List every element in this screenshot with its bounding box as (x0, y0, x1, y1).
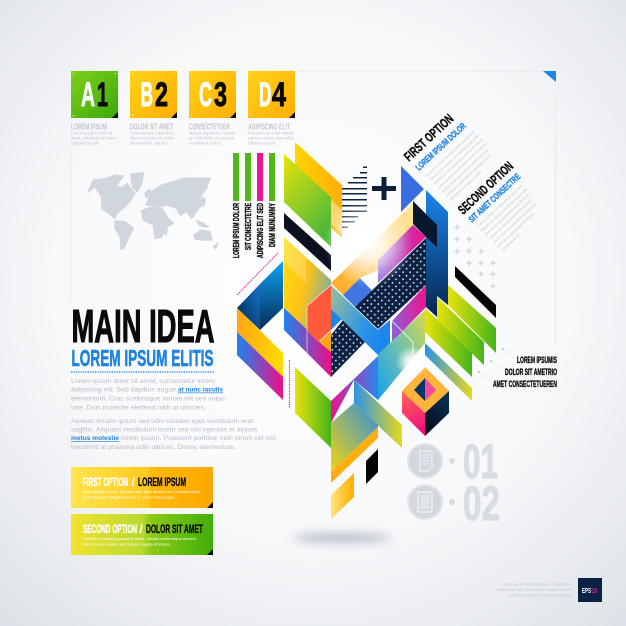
vertical bar labels: ADIPISCING ELIT SED (256, 203, 265, 258)
tile C3: C (199, 76, 212, 114)
left magenta band (237, 332, 283, 400)
tile captions: ADIPISCING ELIT (248, 122, 290, 132)
button: first option: / (132, 475, 136, 489)
body text: Aenean ornare ipsum sed odio sodales eget vestibulum erat (71, 418, 253, 425)
magenta blue band (331, 356, 378, 423)
vertical bar labels: SIT CONSECTETRE (244, 203, 253, 250)
small blue triangle (331, 308, 342, 330)
diagonal text block: second option (476, 184, 538, 253)
blue triangle (401, 166, 424, 212)
diagonal heading: first option: FIRST OPTION (401, 111, 456, 164)
left blue diamond right half (260, 261, 283, 330)
cube (402, 367, 449, 436)
body text: adipiscing elit. Sed dapibus augue (71, 386, 176, 394)
body text: hendrerit at pharetra odio ultrices. Donec elementum. (71, 444, 236, 451)
button: first option (71, 467, 213, 508)
tile A1 (71, 71, 118, 118)
tile D4: D (259, 76, 272, 114)
tile C3: 3 (214, 76, 227, 114)
outline on red block (307, 285, 331, 353)
dot 2 (449, 499, 455, 505)
dot 1 (449, 458, 455, 464)
outline shard (390, 319, 413, 363)
footer text (497, 582, 573, 598)
button: second option (71, 514, 213, 555)
geometric composition (237, 142, 496, 519)
purple magenta band (378, 225, 426, 283)
tile captions: Pellentesque bibendum, (130, 130, 175, 136)
tile A1: A (81, 76, 95, 114)
number 01: 01 (463, 436, 498, 489)
diagonal text block: second option: nisl egestas et (500, 233, 521, 253)
blue center parallelogram (343, 278, 378, 307)
button: second option: SECOND OPTION (83, 522, 137, 536)
lower purple band (392, 285, 426, 342)
orange strip (331, 427, 378, 483)
tile D4: 4 (272, 76, 286, 114)
green bottom left parallelogram (295, 367, 331, 448)
tile captions: Mauris dignissim, mauris (189, 130, 235, 136)
right labels: AMET CONSECTETUEREN (493, 379, 557, 389)
diagonal text block: first option: aenean ornare ipsum sed odio sodales eget erat (441, 148, 490, 194)
teal yellow parallelogram (354, 380, 402, 448)
button: first option: FIRST OPTION (83, 475, 128, 489)
yellow blue block (331, 403, 378, 472)
body text: metus molestie (71, 435, 119, 442)
body text: Lorem ipsum dolor sit amet, consectetur lorem (71, 378, 215, 385)
footer text: Lorem ipsum dolor sit amet, consectetur (501, 582, 573, 586)
tall blue column (426, 190, 448, 317)
diagonal text block: second option: vulputate duis molestie eleifend nibh ut ultricies (488, 198, 533, 241)
tile captions: DOLOR SIT AMET (130, 122, 173, 132)
diagonal heading: first option: LOREM IPSUM DOLOR (414, 121, 468, 172)
diagonal text block: first option: nisl egestas et aliquet metus (449, 170, 482, 202)
tile captions: varius turpis convallis (248, 136, 294, 140)
tile captions: ullamcorper. (248, 140, 277, 146)
tile captions (71, 122, 294, 146)
diagonal text block: first option: Aliquam erat volutpat, sed dapibus augue nulla (429, 133, 480, 182)
teal diagonal band (331, 285, 390, 355)
subheading: LOREM IPSUM ELITIS (72, 345, 214, 371)
tile C3 (189, 71, 236, 118)
button: second option: Curabitur vehicula posuere tellus. Mauris scelerisque laoreet (83, 536, 197, 541)
lens glare bottom (396, 346, 428, 378)
tile B2: 2 (155, 76, 168, 114)
top orange parallelogram (295, 142, 342, 238)
lens glare top (324, 199, 412, 287)
button: first option: ante et augue fringilla cursus, in porta metus eget. (83, 494, 175, 500)
diagonal text block: first option: Praesent ac metus vel magna tempor varius lorem (425, 130, 476, 178)
plus icon (372, 177, 396, 200)
icon: blue corner triangle (543, 71, 556, 82)
red block (307, 285, 331, 342)
tile captions: elementum, sapien. (130, 140, 169, 146)
diagonal heading: second option: SECOND OPTION (455, 158, 516, 217)
EPS badge: EPS (582, 588, 591, 595)
tile captions: adipiscing elit. (71, 140, 100, 146)
main idea heading: MAIN IDEA (72, 300, 214, 352)
icon: document circle (408, 444, 442, 478)
footer text: iaculis elementum cras scelerisque. (509, 592, 572, 598)
tile captions: libero id posuere dolor (130, 136, 175, 140)
button: second option: odio sit amet volutlex. Sed semper, magna ut tempus. (83, 542, 171, 546)
orange glare band (331, 203, 413, 295)
button: second option: / (140, 522, 144, 536)
yellow column highlight (284, 237, 306, 283)
diagonal text block: second option: aenean ornare ipsum sed odio sodales eget erat (492, 202, 538, 245)
stripes half circle (342, 166, 367, 228)
small orange (319, 331, 331, 352)
center dotted diamond (355, 238, 426, 329)
diagonal text block: first option (425, 130, 492, 202)
right teal band (425, 343, 472, 401)
tile captions: Lorem ipsum dolor sit (71, 130, 113, 136)
tile captions: LOREM IPSUM (71, 122, 107, 132)
diagonal text block: second option: vestibulum sagittis aliquam vestibulum (496, 212, 535, 249)
translucent band (378, 310, 425, 400)
diagonal text block: second option: Praesent ac metus vel magna tempor varius lorem (476, 184, 524, 229)
body text: lorem ipsum. Praesent porttitor nibh lorem vel nisi (121, 435, 277, 442)
tile captions: Praesent sit amet mauris (248, 130, 294, 136)
right labels: LOREM IPSUMIS (517, 355, 557, 365)
frame (70, 71, 556, 345)
left blue diamond left half (237, 284, 260, 330)
icon: tablet circle (408, 484, 442, 520)
EPS badge: 10 (592, 588, 598, 595)
lime parallelogram (284, 154, 331, 247)
right labels: DOLOR SIT AMETRIO (505, 367, 557, 377)
body text: elementum. Cras scelerisque rutrum elit sed vulpu- (71, 396, 227, 402)
button: first option: LOREM IPSUM (138, 475, 186, 489)
button: first option: Nulla facilisi. Fusce ut lorem elit, eget auctor nisl. Curabitur quis (83, 489, 200, 494)
magenta dotted vertical (288, 360, 290, 408)
vertical bar labels (232, 203, 277, 258)
diagonal heading: second option: SIT AMET CONSECTRE (467, 171, 522, 224)
number 02: 02 (463, 478, 500, 531)
right labels (493, 355, 557, 389)
diagonal text block: second option: elementum cras scelerisque rutrum elit sed mi (484, 193, 531, 237)
tile B2 (130, 71, 177, 118)
button: second option: DOLOR SIT AMET (146, 522, 203, 536)
tile captions: CONSECTETUER (189, 122, 230, 132)
plus sign grid (454, 224, 496, 289)
diagonal heading: second option (455, 158, 522, 224)
diagonal text block: first option: elementum cras scelerisque rutrum elit sed mi (433, 138, 484, 186)
diagonal text block: second option: Aliquam erat volutpat, sed dapibus augue nulla (480, 187, 529, 233)
diagonal heading: first option (401, 111, 468, 172)
body text: tate. Duis molestie eleifend nibh ut ultricies. (71, 404, 206, 412)
yellow column (284, 237, 331, 330)
tile D4 (248, 71, 295, 118)
green magenta bars (233, 153, 275, 201)
vertical bar labels: LOREM IPSUM DOLOR (232, 203, 241, 258)
black small parallelogram (366, 449, 378, 484)
tile captions: vestibulum purus. (189, 140, 222, 146)
ground shadow (292, 534, 392, 542)
tile B2: B (140, 76, 153, 114)
footer text: adipiscing elit. Sed dapibus augue at nunc (497, 587, 572, 592)
right green band 2 (437, 297, 484, 365)
tile captions: amet, consectetur lorem (71, 136, 117, 140)
right green band 1 (448, 285, 496, 353)
right black stripe (455, 266, 496, 318)
body text (71, 378, 277, 451)
gold shard (331, 200, 342, 234)
body text: at nunc iaculis (178, 386, 223, 394)
tile captions: ac sollicitudin at volutpat (189, 136, 235, 140)
blue magenta column band (284, 308, 331, 377)
magenta dashed diagonal (237, 253, 278, 295)
diagonal text block: first option: vulputate duis molestie eleifend nibh ut ultricies (437, 142, 488, 190)
diagonal text block: first option: vestibulum sagittis aliquam vestibulum lorem (445, 154, 492, 198)
small orange parallelogram (331, 473, 354, 519)
left orange band (237, 308, 283, 377)
EPS badge (578, 578, 602, 602)
black stripe (284, 213, 331, 271)
body text: sagittis. Aliquam vestibulum lorem sed nisl egestas et aliquet (71, 426, 257, 434)
label leader lines (478, 348, 515, 381)
vertical bar labels: DIAM NUNUMMY (268, 203, 277, 247)
world map (88, 173, 218, 249)
dotted rule (71, 371, 214, 373)
tile A1: 1 (97, 76, 108, 114)
dark overlay block (413, 201, 437, 247)
right green band 3 (425, 308, 472, 377)
lower dotted diamond (331, 320, 365, 377)
